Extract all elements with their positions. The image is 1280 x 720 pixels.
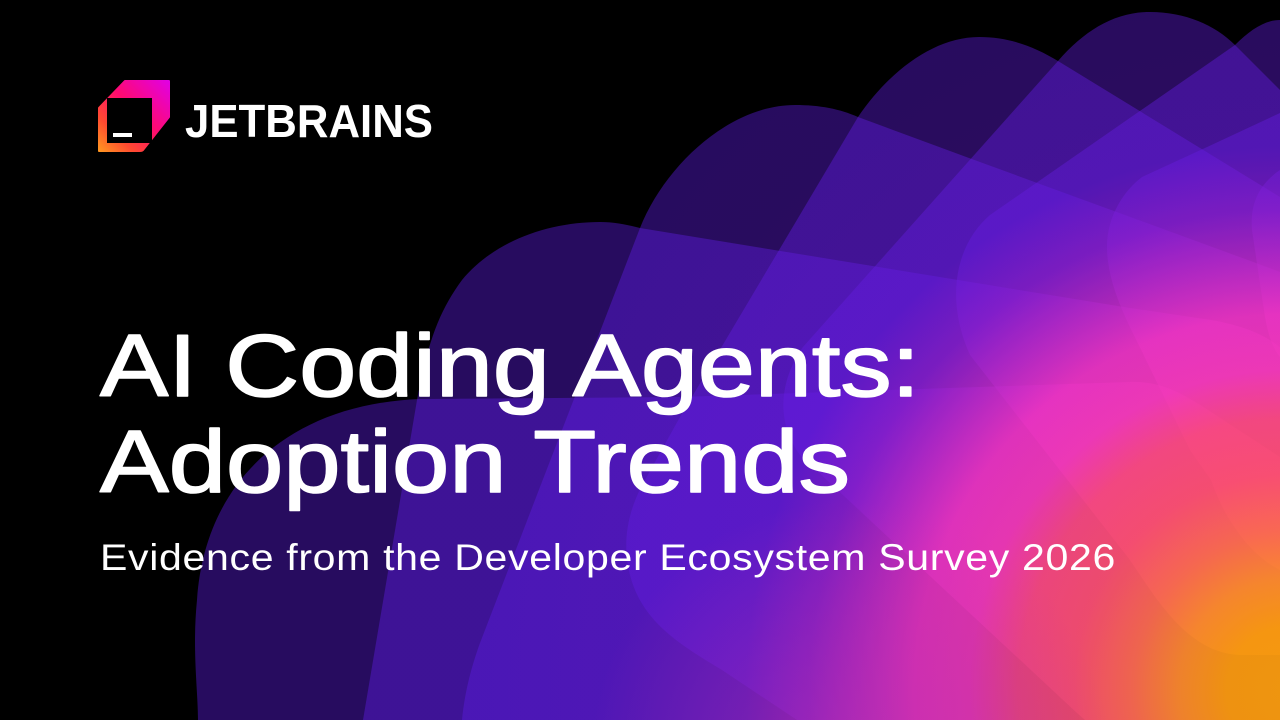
petal 4 [626, 37, 1280, 720]
title: AI Coding Agents: [100, 316, 920, 415]
wordmark: JETBRAINS [185, 95, 433, 147]
petal 7 [1107, 113, 1280, 570]
petal 2 [363, 222, 1280, 720]
title: Adoption Trends [100, 412, 850, 511]
petal 8 [1252, 170, 1280, 357]
JetBrains logo [99, 81, 433, 151]
title [100, 316, 920, 511]
lower magenta glow [590, 500, 1110, 720]
petal 6 [956, 20, 1280, 655]
petal 3 [462, 105, 1280, 720]
subtitle: Evidence from the Developer Ecosystem Survey 2026 [100, 537, 1116, 578]
petal 1 [195, 382, 1280, 720]
petal 5 [783, 12, 1280, 720]
icon: logo mark [99, 81, 169, 151]
